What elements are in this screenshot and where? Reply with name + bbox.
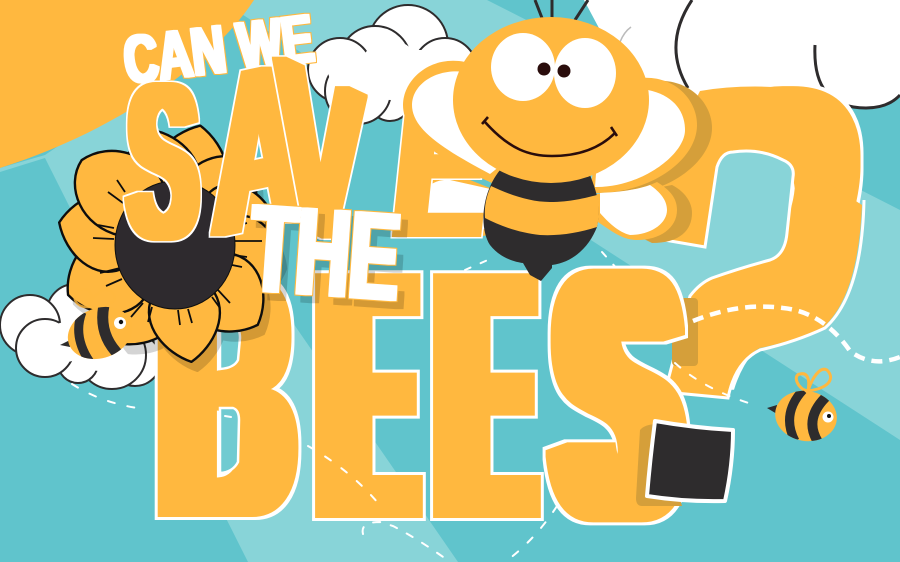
B upper counter — [220, 326, 240, 369]
petal veins — [93, 180, 262, 325]
stinger — [60, 340, 70, 347]
hook shoulder fill — [650, 87, 790, 247]
petals — [51, 118, 285, 367]
word: CAN WE: CAN WE — [120, 1, 318, 99]
letter A: A — [214, 12, 303, 286]
stinger — [767, 405, 777, 414]
shadow of S on the question mark — [672, 298, 698, 366]
body with stripes — [483, 170, 599, 281]
head — [453, 17, 649, 183]
eye — [114, 317, 126, 329]
letter E: E — [385, 56, 498, 279]
counter of the hook — [640, 151, 793, 296]
wing shadows — [605, 81, 712, 196]
eye — [822, 412, 834, 422]
square dot of the question mark — [636, 421, 733, 506]
small bee on sunflower — [60, 298, 127, 360]
big bee — [403, 0, 712, 281]
cloud: top middle — [308, 5, 477, 124]
stripes — [79, 305, 120, 365]
big bee: lower left wing — [413, 172, 495, 238]
flight trails: dashes over letters — [225, 307, 900, 503]
hook outline — [653, 151, 864, 398]
lower right wing — [597, 182, 677, 240]
seed disk — [115, 181, 235, 309]
wings — [796, 369, 831, 391]
upper right wing — [590, 78, 697, 193]
sun — [0, 0, 254, 168]
body — [60, 298, 140, 368]
flight trail: thin dashes behind letters — [72, 252, 618, 562]
background ray: lower left — [0, 94, 458, 562]
lower stem fill — [665, 165, 862, 398]
background ray: upper right — [220, 0, 900, 440]
word: SAVE — [128, 7, 498, 301]
question mark — [662, 86, 866, 400]
eyes — [491, 33, 555, 101]
stripes — [790, 390, 828, 442]
wings — [75, 289, 115, 307]
smile — [482, 117, 617, 156]
letter S: S — [128, 37, 198, 285]
antennae — [535, 0, 588, 20]
B lower counter — [220, 408, 239, 473]
sunflower — [51, 118, 285, 367]
word: BEES — [163, 199, 670, 562]
letter V: V — [278, 7, 362, 301]
word: THE: THE — [246, 177, 404, 327]
small bee on the right — [767, 369, 841, 446]
cloud: lower left — [0, 284, 161, 389]
cloud: top right — [584, 0, 900, 108]
body — [771, 386, 841, 446]
upper left wing — [403, 61, 520, 183]
